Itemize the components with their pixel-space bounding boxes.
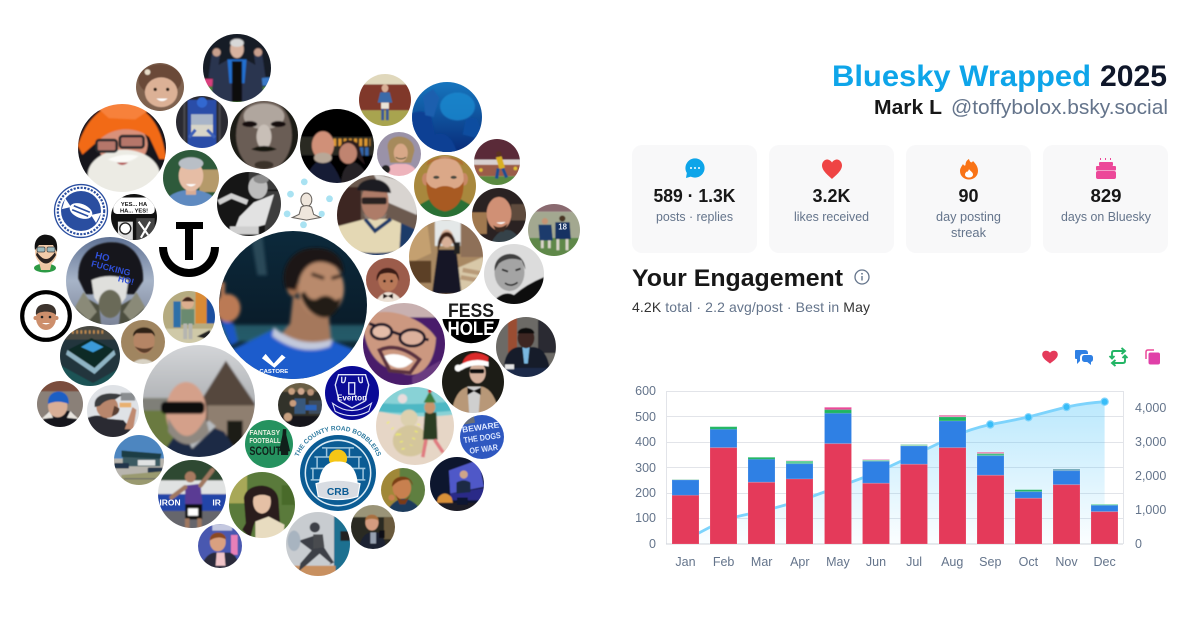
bar: Dec (1091, 504, 1118, 544)
avatar: bearded cartoon (34, 235, 57, 272)
right axis labels: 3,000 (1135, 435, 1166, 449)
avatar: fantasy football scout logo: FOOTBALL (249, 438, 281, 445)
avatar: comic panel: YES... HA (121, 202, 147, 208)
avatar: blue silhouette (410, 80, 484, 154)
avatar: sunglasses man by stone pyramid (140, 342, 258, 460)
avatar: ironman runner (156, 458, 228, 530)
left axis labels: 200 (635, 486, 656, 500)
avatar: tv pundit in suit (494, 316, 558, 378)
month labels: May (826, 555, 850, 569)
avatar: fess hole logo: HOLE (448, 319, 494, 340)
avatar: man in restaurant (350, 504, 396, 550)
card: day posting streak: 90 (958, 186, 978, 206)
avatar: man in santa hat (440, 349, 506, 415)
avatar: fess hole logo: FESS (448, 301, 494, 322)
avatar: couple at night (298, 107, 376, 185)
avatar: ironman runner: IR (212, 498, 221, 508)
avatar: county road bobblers badge (294, 426, 381, 511)
avatar: laughing man with glasses (361, 301, 447, 387)
card: days on Bluesky: days on Bluesky (1061, 209, 1151, 224)
bar: Jan (672, 479, 699, 544)
avatar: players at stadium: 18 (558, 222, 568, 231)
left axis labels: 0 (649, 537, 656, 551)
bar: Sep (977, 452, 1004, 544)
card: posts and replies: posts · replies (656, 209, 733, 224)
avatar: child with bow tie (365, 257, 411, 303)
right axis labels: 1,000 (1135, 503, 1166, 517)
avatar: man in blue beanie (36, 380, 84, 428)
avatar: beware the dogs of war banner: THE DOGS (463, 430, 502, 445)
avatar: street mural footballer (286, 512, 350, 576)
avatar: fighter pilot helmet: HO (94, 250, 111, 265)
user name and handle: Mark L (874, 97, 942, 119)
stat cards (632, 145, 1168, 253)
left axis labels: 600 (635, 384, 656, 398)
bar: Nov (1053, 469, 1080, 544)
avatar: players at stadium (527, 203, 581, 257)
engagement summary: 4.2K total · 2.2 avg/post · Best in May (632, 299, 870, 315)
avatar: T anchor logo (159, 222, 219, 277)
avatar: fighter pilot helmet: HO! (117, 273, 135, 287)
right axis labels: 2,000 (1135, 469, 1166, 483)
month labels: Aug (941, 555, 963, 569)
legend icons (1042, 348, 1160, 366)
month labels: Jul (906, 555, 922, 569)
avatar: stained glass panel (175, 95, 229, 149)
left axis labels: 300 (635, 461, 656, 475)
month labels: Oct (1019, 555, 1039, 569)
avatar: beware the dogs of war banner: OF WAR (469, 442, 499, 456)
avatar: fantasy football scout logo: SCOUT (249, 445, 282, 458)
left axis labels: 500 (635, 410, 656, 424)
avatar: comic panel (110, 193, 158, 241)
avatar: player with raised fist (219, 231, 367, 379)
avatar: manager in blue jacket (201, 32, 273, 104)
combo chart: monthly engagement (635, 384, 1166, 569)
avatar: comic panel: HA... YES! (120, 208, 148, 214)
avatar: aerial stadium (58, 324, 122, 388)
avatar: speaker on stage screen (429, 456, 485, 512)
left axis labels: 400 (635, 435, 656, 449)
bar: Aug (939, 415, 966, 544)
avatar: own profile with black ring (22, 292, 70, 340)
avatar: fantasy football scout logo: FANTASY (249, 428, 280, 437)
right axis labels: 0 (1135, 537, 1142, 551)
heading: your engagement: Your Engagement (632, 265, 843, 292)
month labels: Mar (751, 555, 772, 569)
cumulative line (686, 402, 1105, 540)
avatar: cartoon figure by painted wall (163, 291, 215, 343)
avatar: beware the dogs of war banner (457, 414, 505, 460)
icon: heart (1042, 351, 1058, 364)
avatar: black and white smiling man (482, 242, 546, 306)
title: Bluesky Wrapped (832, 60, 1091, 93)
bar: Mar (748, 457, 775, 544)
avatar: fighter pilot helmet: FUCKING (90, 258, 132, 278)
card: day posting streak: streak (951, 225, 986, 240)
card: days on Bluesky: 829 (1090, 186, 1122, 206)
avatar: man on tv set (197, 523, 243, 569)
card: day posting streak: day posting (936, 209, 1001, 224)
avatar: orange hat and white beard (78, 104, 166, 192)
card: days on Bluesky (1043, 145, 1168, 253)
gridlines (666, 391, 1124, 544)
icon: speech bubbles (1075, 350, 1093, 365)
avatar: toffee badge (55, 185, 107, 237)
icon: layered squares (1146, 350, 1160, 364)
avatar: curly haired man (376, 131, 422, 177)
user name and handle: @toffybolox.bsky.social (951, 97, 1168, 119)
avatar: stand on a sunny street (113, 434, 165, 486)
card: posts and replies (632, 145, 757, 253)
avatar: kid by red wall (358, 73, 412, 127)
icon: repost arrows (1110, 348, 1128, 366)
avatar: everton crest (325, 366, 379, 420)
month labels: Apr (790, 555, 810, 569)
right axis labels: 4,000 (1135, 401, 1166, 415)
avatar: group of fans (278, 383, 322, 427)
bar: Jul (900, 444, 928, 544)
avatar: fantasy football scout logo (245, 420, 293, 468)
avatar: fess hole logo (442, 301, 500, 343)
avatar: snowman and elf on beach (374, 385, 456, 467)
avatar: woman with long hair (227, 470, 297, 540)
month labels: Sep (979, 555, 1001, 569)
bar: Jun (862, 459, 890, 544)
avatar: man drinking (86, 384, 140, 438)
month labels: Jan (675, 555, 696, 569)
avatar: ironman runner: IRON (159, 498, 181, 508)
avatar: county road bobblers badge: THE COUNTY ROAD BOBBLERS (294, 426, 381, 456)
left axis labels (635, 384, 656, 551)
month labels: Nov (1055, 555, 1078, 569)
bar: Feb (710, 427, 737, 544)
stacked bars: likes, replies, reposts, quotes (672, 407, 1118, 544)
avatar: beware the dogs of war banner: BEWARE (461, 419, 500, 435)
bar: Oct (1015, 490, 1042, 544)
avatar: bearded painted portrait (412, 153, 478, 219)
month labels: Dec (1093, 555, 1116, 569)
month labels: Feb (713, 555, 734, 569)
avatar: player with raised fist: CASTORE (259, 369, 288, 375)
card: likes received (769, 145, 894, 253)
month labels: Jun (866, 555, 886, 569)
avatar: man in cap and retro kit (335, 173, 419, 257)
month labels (675, 555, 1116, 569)
avatar: fighter pilot helmet (64, 235, 156, 327)
card: likes received: 3.2K (812, 186, 850, 206)
avatar: painted man (380, 467, 426, 513)
title: 2025 (1100, 60, 1167, 93)
avatar: smiling older man (163, 150, 219, 206)
avatar: black and white portrait (230, 101, 298, 169)
header (832, 60, 1168, 119)
right axis labels (1135, 401, 1166, 551)
card: likes received: likes received (794, 209, 869, 224)
avatar: meditating figure with snowflakes (284, 178, 336, 230)
avatar: everton crest: Everton (337, 394, 367, 403)
avatar: red stands football action (473, 138, 521, 186)
left axis labels: 100 (635, 511, 656, 525)
avatar: black and white man at desk (217, 172, 281, 236)
bar: Apr (786, 460, 813, 544)
line points (987, 398, 1108, 428)
avatar: smiling toddler (135, 62, 185, 112)
avatar: woman in black dress mirror selfie (407, 218, 485, 296)
card: posts and replies: 589 · 1.3K (654, 186, 736, 206)
cumulative area (686, 402, 1105, 544)
card: day posting streak (906, 145, 1031, 253)
avatar: county road bobblers badge: CRB (327, 487, 349, 498)
bar: May (824, 407, 852, 544)
avatar: bald man smiling (471, 187, 527, 243)
avatar: man with brown hair (120, 319, 166, 365)
avatar bubble cluster (20, 34, 580, 576)
